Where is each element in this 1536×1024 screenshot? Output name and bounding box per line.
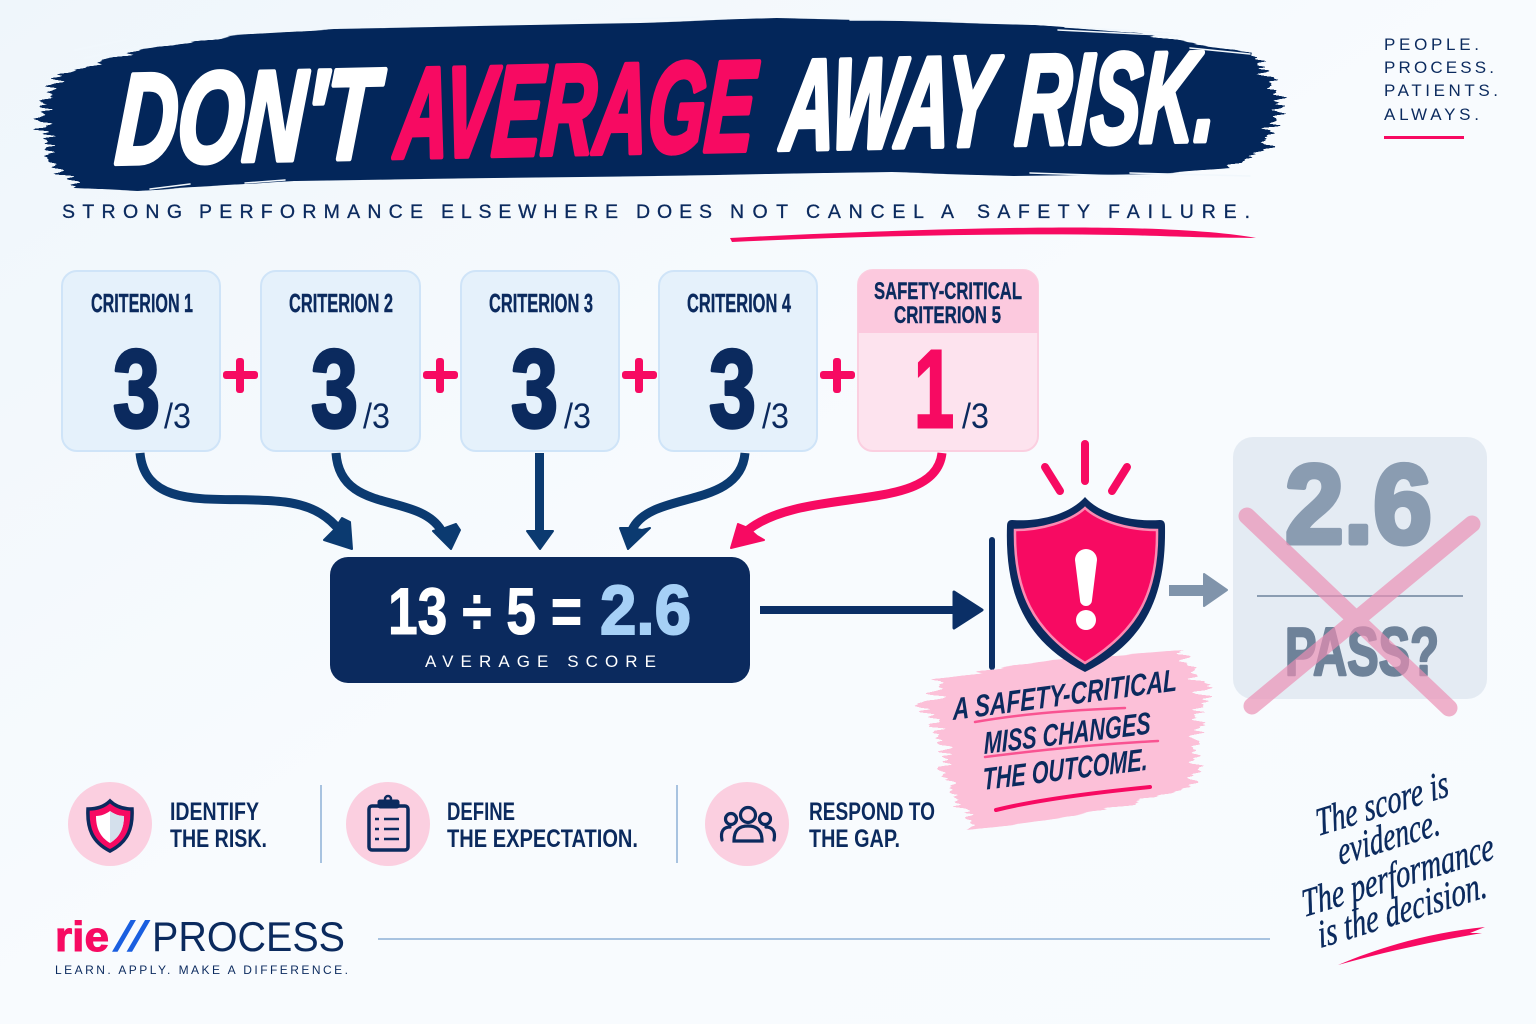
logo: rie — [55, 913, 109, 960]
headline: RISK. — [1012, 25, 1222, 173]
step: identify the risk: IDENTIFY — [170, 798, 259, 826]
divider — [676, 785, 678, 863]
red cross — [1247, 516, 1472, 708]
card: criterion 4: /3 — [762, 397, 789, 436]
card: criterion 2: CRITERION 2 — [289, 288, 393, 318]
tagline: people process patients always — [1384, 35, 1498, 139]
callout text — [952, 662, 1177, 797]
icon: clipboard — [369, 796, 408, 850]
closing note: evidence. — [1335, 800, 1443, 874]
brush background — [925, 650, 1205, 830]
subtitle: CANCEL — [806, 201, 924, 223]
pink brush callout — [925, 650, 1205, 830]
footer rule — [378, 938, 1270, 940]
arrow: criterion 1 to score — [140, 453, 352, 549]
card: criterion 3: /3 — [564, 397, 591, 436]
card: criterion 3: CRITERION 3 — [489, 288, 593, 318]
divider — [320, 785, 322, 863]
callout text: MISS CHANGES — [984, 705, 1151, 761]
subtitle underline — [730, 227, 1256, 242]
callout strokes — [975, 708, 1158, 810]
subtitle: NOT — [730, 201, 788, 223]
subtitle: PERFORMANCE — [199, 201, 423, 223]
warning shield — [1007, 497, 1165, 672]
card: criterion 1: CRITERION 1 — [91, 288, 193, 318]
card: criterion 4: 3 — [709, 328, 756, 451]
callout text: THE OUTCOME. — [983, 742, 1148, 797]
headline: AWAY — [776, 30, 1006, 178]
subtitle: DOES — [636, 201, 712, 223]
card: safety-critical criterion 5: SAFETY-CRITICAL — [874, 278, 1022, 305]
card: criterion 4: CRITERION 4 — [687, 288, 791, 318]
headline: DON'T — [112, 43, 388, 191]
closing note: The score is — [1313, 762, 1451, 845]
card: safety-critical criterion 5: CRITERION 5 — [894, 302, 1001, 329]
card: safety-critical criterion 5: /3 — [962, 397, 989, 436]
warning rays — [1045, 444, 1127, 491]
arrow: shield to result — [1169, 574, 1227, 606]
crossed-out pass panel: PASS? — [1285, 614, 1439, 690]
step: define the expectation: THE EXPECTATION. — [447, 825, 638, 853]
headline — [109, 25, 1225, 191]
card: criterion 2: 3 — [311, 328, 358, 451]
average score box: 13 ÷ 5 = — [388, 574, 582, 648]
closing note — [1299, 762, 1497, 965]
title banner — [42, 17, 1280, 191]
card: safety-critical criterion 5 — [858, 270, 1038, 451]
card: criterion 1: 3 — [113, 328, 160, 451]
logo — [55, 913, 348, 977]
tagline: people process patients always: PROCESS. — [1384, 58, 1494, 77]
arrow: score to shield — [760, 592, 982, 628]
card: criterion 4 — [659, 271, 817, 451]
subtitle: SAFETY — [977, 201, 1090, 223]
icon: shield — [88, 801, 132, 851]
subtitle: ELSEWHERE — [441, 201, 618, 223]
step: define the expectation: DEFINE — [447, 798, 515, 826]
arrow: safety-critical criterion to score — [731, 453, 942, 548]
card: criterion 3 — [461, 271, 619, 451]
subtitle — [62, 201, 1250, 223]
arrow: criterion 2 to score — [336, 453, 460, 549]
step: respond to the gap: THE GAP. — [809, 825, 900, 853]
step: respond to the gap — [705, 782, 935, 866]
step: respond to the gap: RESPOND TO — [809, 798, 935, 826]
crossed-out pass panel: 2.6 — [1285, 442, 1432, 567]
brush stroke background — [42, 18, 1280, 191]
card: criterion 1: /3 — [164, 397, 191, 436]
average score box: 2.6 — [600, 571, 691, 649]
icon: people — [721, 808, 775, 841]
tagline: people process patients always: PATIENTS. — [1384, 81, 1498, 100]
callout text: A SAFETY-CRITICAL — [952, 662, 1177, 727]
logo: LEARN. APPLY. MAKE A DIFFERENCE. — [55, 963, 348, 977]
crossed-out pass panel — [1233, 437, 1487, 708]
card: criterion 2 — [261, 271, 420, 451]
logo: PROCESS — [152, 913, 345, 960]
brush dry-bristle streaks — [75, 17, 1250, 189]
headline: AVERAGE — [390, 35, 762, 186]
logo: // — [112, 913, 150, 960]
tagline: people process patients always: ALWAYS. — [1384, 105, 1479, 124]
subtitle: FAILURE. — [1108, 201, 1250, 223]
closing note underline — [1338, 927, 1485, 965]
step: identify the risk: THE RISK. — [170, 825, 267, 853]
plus signs — [223, 358, 855, 393]
average score box: AVERAGE SCORE — [425, 652, 656, 671]
card: safety-critical criterion 5: 1 — [914, 328, 954, 451]
card: criterion 3: 3 — [511, 328, 558, 451]
barrier line — [989, 537, 995, 670]
subtitle: STRONG — [62, 201, 182, 223]
card: criterion 1 — [62, 271, 220, 451]
tagline: people process patients always: PEOPLE. — [1384, 35, 1479, 54]
arrow: criterion 4 to score — [620, 453, 745, 549]
step: identify the risk — [68, 782, 267, 866]
subtitle: A — [941, 201, 954, 223]
card: criterion 2: /3 — [363, 397, 390, 436]
step: define the expectation — [346, 782, 638, 866]
arrow: criterion 3 to score — [527, 453, 553, 549]
average score box — [330, 557, 750, 683]
